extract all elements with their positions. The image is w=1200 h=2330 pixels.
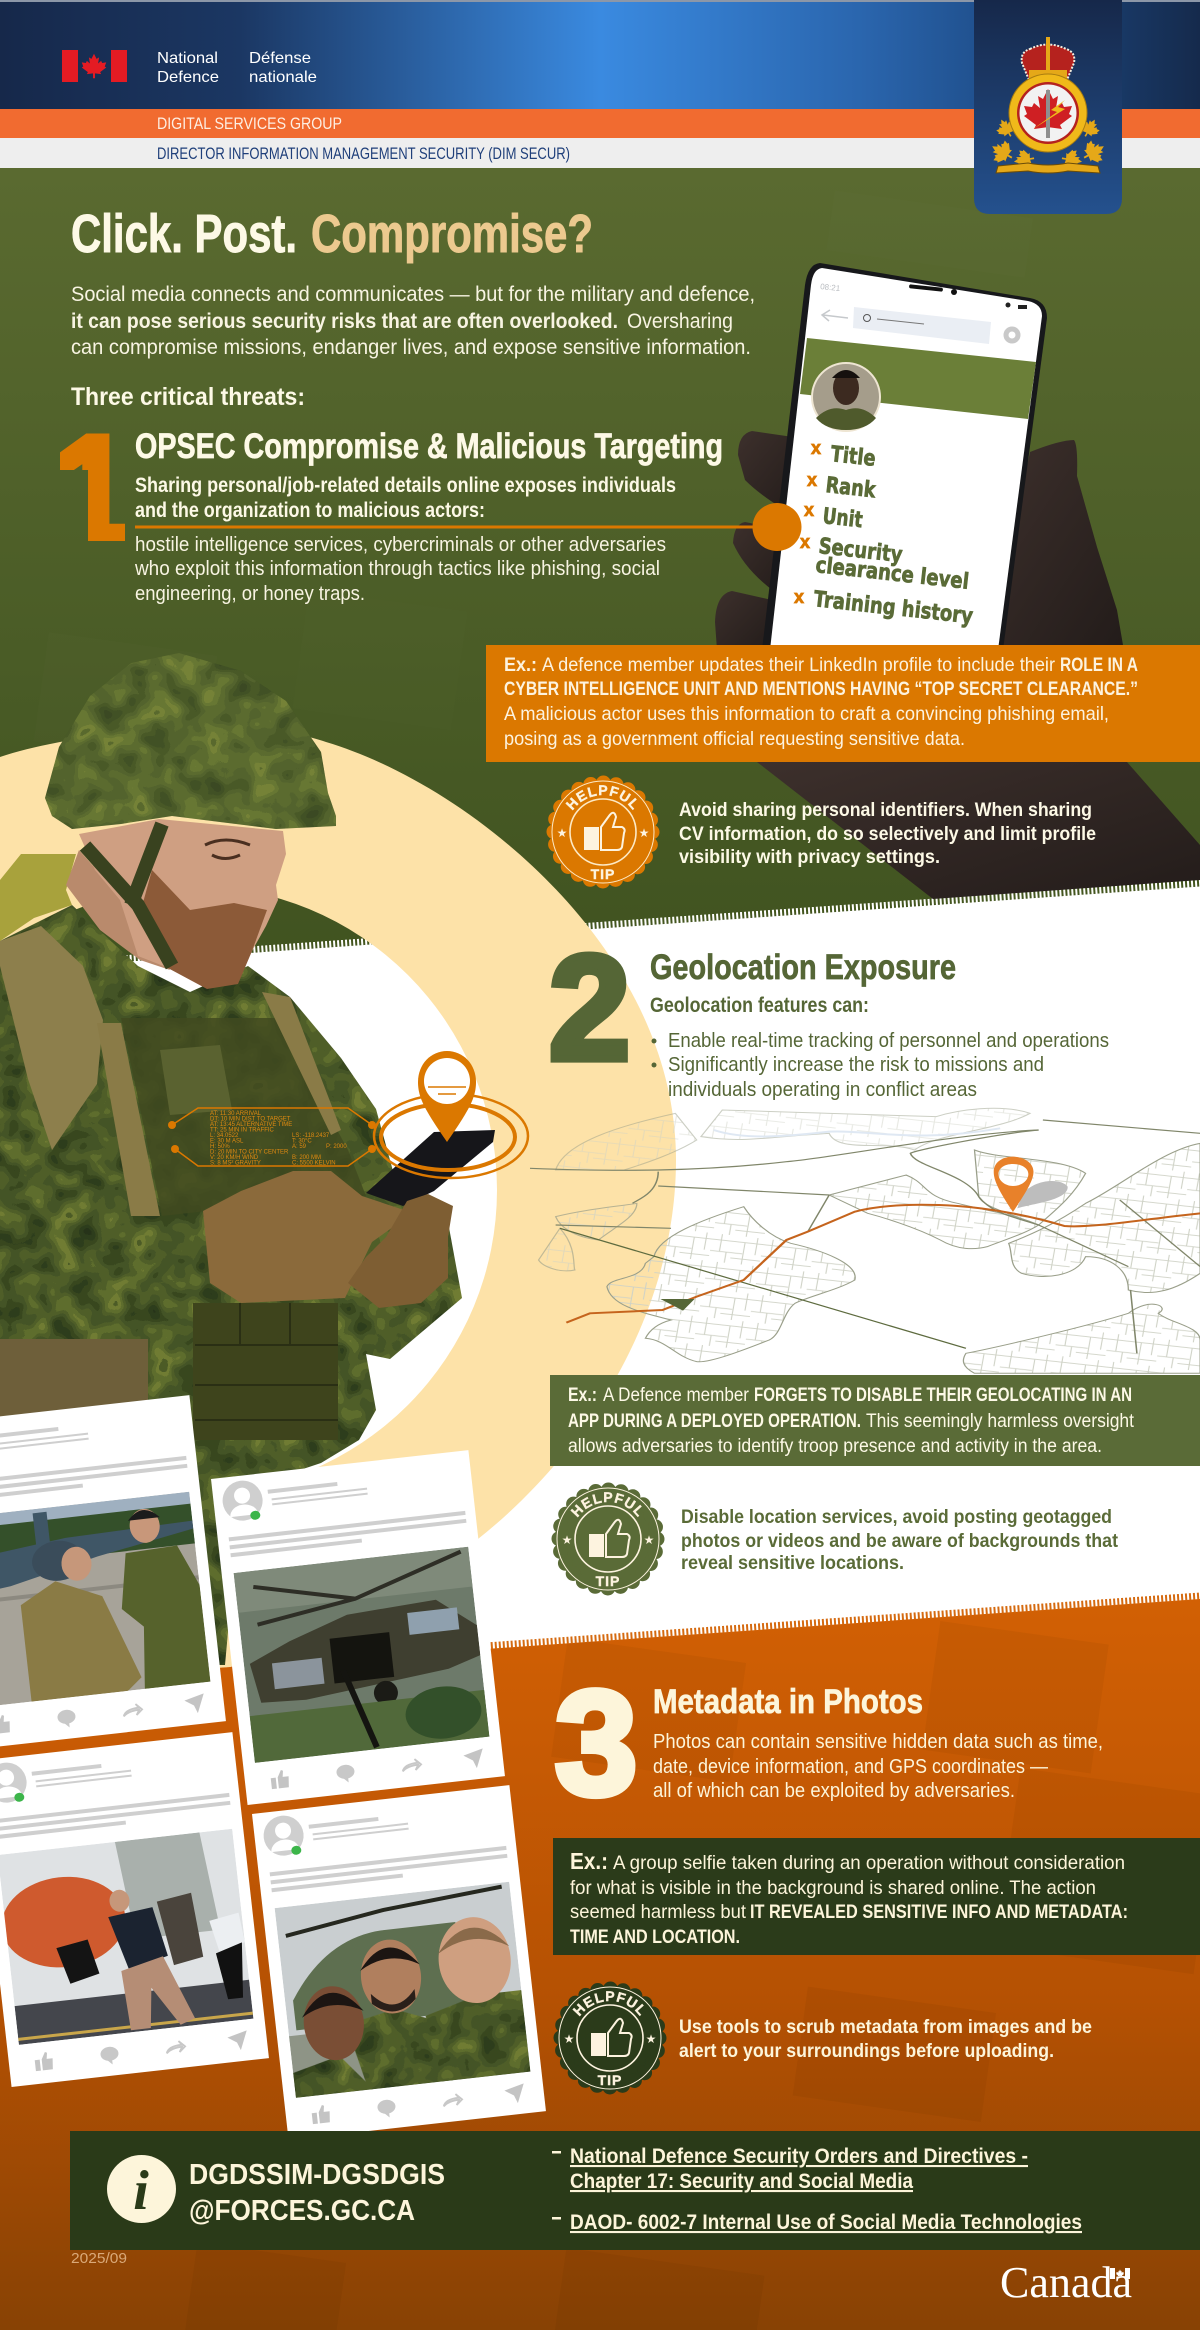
intro paragraph: Social media connects and communicates — but for the military and defence, [71, 283, 755, 306]
tip text 1 [679, 799, 1096, 868]
band label: director: DIRECTOR INFORMATION MANAGEMENT SECURITY (DIM SECUR) [157, 144, 570, 163]
tip badge 2: TIP [596, 1573, 620, 1589]
example box 1: posing as a government official requesting sensitive data. [504, 729, 965, 750]
threat 2 numeral: 2 [549, 926, 630, 1091]
x markers: x [804, 500, 814, 520]
contact email: DGDSSIM-DGSDGIS [189, 2159, 445, 2191]
example box 2: APP DURING A DEPLOYED OPERATION. [568, 1411, 861, 1432]
HUD data overlay: AT: 13:45 ALTERNATIVE TIME [210, 1122, 292, 1128]
example box 2: allows adversaries to identify troop presence and activity in the area. [568, 1436, 1102, 1457]
phone body [762, 263, 1047, 650]
policy links [552, 2145, 1082, 2234]
example box 1: Ex.: [504, 655, 537, 676]
vest straps [97, 992, 341, 1216]
department wordmark: National [157, 50, 218, 67]
map pin shadow [1017, 1181, 1068, 1208]
tip text 3: Use tools to scrub metadata from images and be [679, 2016, 1092, 2038]
info icon: i [133, 2160, 149, 2222]
title: Compromise? [311, 204, 593, 264]
profile fields list: Training history [812, 587, 974, 630]
tip text 2: Disable location services, avoid posting geotagged [681, 1506, 1112, 1528]
social post card: deck workout [0, 1732, 269, 2087]
info icon [107, 2155, 176, 2223]
tip badge 3: TIP [598, 2072, 622, 2088]
x markers: x [800, 532, 810, 552]
tip badge 1: TIP [591, 866, 615, 882]
left glove [348, 1194, 453, 1308]
example box 3: IT REVEALED SENSITIVE INFO AND METADATA: [750, 1901, 1128, 1923]
HUD data overlay: C: 5500 KELVIN [292, 1160, 336, 1166]
background: orange section [0, 1599, 1200, 2330]
HUD data overlay: S: 8 MS² GRAVITY [210, 1160, 261, 1166]
example box 3: Ex.: [570, 1848, 608, 1874]
tip text 1: CV information, do so selectively and limit profile [679, 823, 1096, 845]
background: cream circle [0, 728, 676, 1683]
department wordmark: Defence [157, 69, 219, 86]
threat 1 heading: OPSEC Compromise & Malicious Targeting [135, 427, 723, 466]
header bar [0, 0, 1200, 168]
threat 3 body text: date, device information, and GPS coordinates — [653, 1755, 1048, 1778]
contact email: @FORCES.GC.CA [189, 2195, 415, 2227]
example box 2: A Defence member [603, 1385, 750, 1406]
soldier photo [0, 653, 495, 1665]
policy links: DAOD- 6002-7 Internal Use of Social Media Technologies [570, 2211, 1082, 2234]
flag: Canada [62, 50, 127, 82]
x markers: x [811, 438, 821, 458]
location pin with rings [374, 1051, 528, 1178]
post photo [234, 1547, 489, 1763]
profile fields list: Security [817, 534, 904, 568]
threat 2 heading: Geolocation Exposure [650, 948, 956, 987]
contact email [189, 2159, 445, 2227]
soldier face [79, 819, 286, 987]
threat 3 numeral: 3 [555, 1661, 637, 1826]
map pin [994, 1157, 1033, 1212]
social post card: aircraft [0, 1395, 226, 1750]
HUD data overlay: H: 50% [210, 1144, 230, 1150]
subheading: three critical threats: Three critical threats: [71, 383, 305, 411]
threat 2 bullet list: Significantly increase the risk to missions and [668, 1053, 1044, 1076]
threat 2 bullet list: individuals operating in conflict areas [668, 1078, 977, 1101]
helmet [45, 653, 336, 829]
HUD data overlay: AT: 11:30 ARRIVAL [210, 1111, 262, 1117]
example box 2: Ex.: [568, 1385, 597, 1406]
example box 1 [486, 645, 1200, 762]
threat 3 body text: Photos can contain sensitive hidden data such as time, [653, 1730, 1103, 1753]
status bar: 08:21 [820, 282, 841, 293]
department wordmark: Défense [249, 50, 311, 67]
crest roundel [1009, 74, 1087, 152]
tip text 1: Avoid sharing personal identifiers. When sharing [679, 799, 1092, 821]
background: white section [0, 880, 1200, 1683]
soldier shoulder pack [0, 926, 103, 1150]
threat 1 lead text: and the organization to malicious actors: [135, 499, 485, 522]
crest leaves [986, 115, 1110, 172]
example box 3: TIME AND LOCATION. [570, 1926, 740, 1948]
example box 1: ROLE IN A [1060, 655, 1138, 676]
example box 3: for what is visible in the background is shared online. The action [570, 1877, 1096, 1899]
threat 3 heading: Metadata in Photos [653, 1683, 923, 1721]
chin strap [85, 824, 172, 966]
soldier beard [141, 870, 267, 989]
example box 3: A group selfie taken during an operation without consideration [613, 1852, 1125, 1874]
tip badge 3: ★ [646, 2032, 656, 2046]
profile fields list: clearance level [814, 553, 970, 595]
example box 3: seemed harmless but [570, 1901, 747, 1923]
tip badge 2: ★ [644, 1533, 654, 1547]
right glove [203, 1171, 407, 1303]
social post card: group selfie [252, 1785, 546, 2140]
tip text 2: reveal sensitive locations. [681, 1552, 904, 1574]
HUD data overlay: L: 34.0522 [210, 1133, 239, 1139]
profile fields list [812, 442, 974, 630]
threat 2 bullet list [652, 1029, 1109, 1101]
soldier vest [121, 1018, 366, 1216]
HUD data overlay: DT: 10 MIN DIST TO TARGET [210, 1116, 291, 1122]
threat 1 lead text: Sharing personal/job-related details online exposes individuals [135, 474, 676, 497]
phone screen [770, 268, 1042, 650]
tip badge 1 [546, 776, 660, 888]
street map [530, 1108, 1200, 1373]
tip text 3 [679, 2016, 1092, 2062]
band label: digital services group: DIGITAL SERVICES GROUP [157, 114, 342, 133]
title: Click. Post. [71, 204, 297, 264]
connector line with dot [135, 503, 802, 551]
threat 1 body text: engineering, or honey traps. [135, 582, 365, 605]
tip badge 1: HELPFUL [566, 785, 637, 810]
title [71, 204, 593, 264]
HUD data overlay: TT: 25 MIN IN TRAFFIC [210, 1128, 275, 1134]
example box 3 [553, 1838, 1200, 1955]
intro paragraph: can compromise missions, endanger lives, and expose sensitive information. [71, 336, 751, 359]
intro paragraph: Oversharing [627, 310, 733, 333]
threat 1 numeral: 1 [54, 405, 131, 578]
social post card: helicopter [211, 1450, 505, 1805]
illustration: hand holding phone [715, 263, 1200, 899]
tip badge 1: ★ [639, 826, 649, 840]
intro paragraph [71, 283, 755, 359]
tip text 2: photos or videos and be aware of backgrounds that [681, 1530, 1118, 1552]
Canada wordmark: Canada [1000, 2258, 1132, 2307]
HUD data overlay: D: 20 MIN TO CITY CENTER [210, 1150, 289, 1156]
threat 1 body text: who exploit this information through tactics like phishing, social [134, 557, 660, 580]
HUD data overlay [168, 1108, 376, 1166]
soldier torso [0, 905, 462, 1665]
settings gear [1006, 329, 1018, 341]
threat 2 bullet list: Enable real-time tracking of personnel and operations [668, 1029, 1109, 1052]
x markers: x [794, 587, 804, 607]
HUD data overlay: LS: -118.2437 [292, 1133, 330, 1139]
x markers [794, 438, 821, 607]
phone in hand [366, 1130, 495, 1206]
threat 1 body text [134, 533, 666, 605]
threat 3 body text: all of which can be exploited by adversaries. [653, 1779, 1015, 1802]
background: green section [0, 168, 1200, 964]
department wordmark [157, 50, 317, 86]
example box 1: A malicious actor uses this information to craft a convincing phishing email, [504, 704, 1109, 725]
HUD data overlay: T: 30°C [292, 1138, 312, 1144]
tip text 2 [681, 1506, 1118, 1574]
map start marker [660, 1299, 695, 1311]
soldier neck [66, 850, 170, 970]
x markers: x [807, 470, 817, 490]
threat 1 lead text [135, 474, 676, 522]
HUD data overlay: B: 200 MM [292, 1155, 321, 1161]
info bar [70, 2131, 1200, 2250]
tip badge 3 [554, 1982, 666, 2094]
lower pouches [193, 1303, 338, 1440]
example box 2: This seemingly harmless oversight [866, 1411, 1135, 1432]
profile avatar [811, 362, 881, 432]
vest pouch [160, 1045, 232, 1115]
threat 3 body text [653, 1730, 1103, 1802]
intro paragraph: it can pose serious security risks that are often overlooked. [71, 310, 618, 333]
HUD data overlay: A: 59 [292, 1144, 307, 1150]
crest ribbon [996, 163, 1100, 173]
profile fields list: Unit [821, 504, 864, 533]
date stamp: 2025/09 [71, 2250, 127, 2267]
tip badge 2: HELPFUL [570, 1492, 642, 1518]
crest panel [974, 0, 1122, 214]
department wordmark: nationale [249, 69, 317, 86]
policy links: Chapter 17: Security and Social Media [570, 2170, 913, 2193]
crest crown [1022, 37, 1074, 81]
map route [566, 1205, 1200, 1323]
profile fields list: Rank [824, 473, 878, 504]
post photo [275, 1882, 530, 2098]
soldier hood [0, 854, 76, 941]
post photo [0, 1492, 210, 1708]
HUD data overlay: V: 20 KM/H WIND [210, 1155, 259, 1161]
search bar [853, 307, 991, 344]
example box 1: A defence member updates their LinkedIn profile to include their [542, 655, 1056, 676]
post photo [0, 1829, 253, 2045]
tip badge 1: ★ [557, 826, 567, 840]
tip badge 3: ★ [564, 2032, 574, 2046]
tip text 3: alert to your surroundings before uploading. [679, 2040, 1054, 2062]
lower pack [0, 1339, 148, 1425]
threat 1 body text: hostile intelligence services, cybercriminals or other adversaries [135, 533, 666, 556]
policy links: National Defence Security Orders and Directives - [570, 2145, 1028, 2168]
HUD data overlay: E: 30 M ASL [210, 1138, 244, 1144]
tip badge 2 [552, 1482, 664, 1596]
tip badge 3: HELPFUL [572, 1991, 644, 2016]
example box 2 [550, 1375, 1200, 1466]
soldier brow and eye [205, 840, 250, 858]
threat 2 lead text: Geolocation features can: [650, 994, 869, 1017]
tip badge 2: ★ [562, 1533, 572, 1547]
tip text 1: visibility with privacy settings. [679, 846, 940, 868]
HUD data overlay: P: 2000 [326, 1144, 347, 1150]
profile fields list: Title [829, 442, 877, 472]
hand [715, 431, 1200, 899]
